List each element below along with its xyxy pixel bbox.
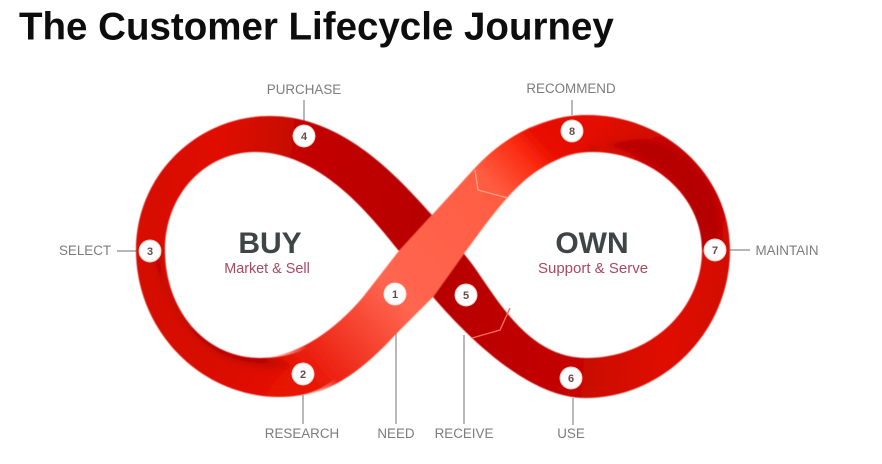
step 5 marker [455, 284, 477, 306]
OWN center label: OWN [555, 227, 629, 260]
ribbon: left loop upper arc [136, 116, 432, 262]
chevron: upper [475, 170, 508, 198]
stage labels: RECOMMEND [526, 81, 616, 96]
step 6 marker [560, 367, 582, 389]
shading: right upper crescent [578, 140, 722, 250]
step 2 marker: 2 [300, 369, 306, 381]
OWN center label: Support & Serve [538, 260, 648, 277]
shading: left lower crescent [155, 250, 296, 368]
step 7 marker [704, 239, 726, 261]
step 4 marker [293, 125, 315, 147]
step 3 marker: 3 [147, 246, 153, 258]
title: The Customer Lifecycle Journey [19, 6, 614, 48]
stage labels: RESEARCH [265, 426, 339, 441]
ribbon: light crossing band [262, 115, 593, 397]
BUY center label: Market & Sell [224, 261, 310, 277]
step 4 marker: 4 [301, 131, 308, 143]
infinity loop ribbon [136, 115, 730, 398]
ribbon: right loop upper arc [528, 115, 730, 250]
ribbon: right loop lower band [400, 215, 730, 398]
step 2 marker [292, 363, 314, 385]
OWN center label [538, 227, 648, 277]
step 1 marker: 1 [392, 289, 398, 301]
step 5 marker: 5 [463, 290, 469, 302]
step markers [139, 120, 726, 389]
stage labels: PURCHASE [267, 82, 341, 97]
BUY center label: BUY [238, 227, 302, 260]
step 1 marker [384, 283, 406, 305]
stage labels [59, 81, 818, 441]
step 6 marker: 6 [568, 373, 574, 385]
stage labels: RECEIVE [435, 426, 493, 441]
step 8 marker: 8 [569, 126, 575, 138]
stage labels: USE [557, 426, 585, 441]
step 3 marker [139, 240, 161, 262]
step 8 marker [561, 120, 583, 142]
step 7 marker: 7 [712, 245, 718, 257]
chevron marks [472, 170, 510, 338]
stage labels: MAINTAIN [756, 243, 818, 258]
chevron: lower [472, 308, 510, 338]
BUY center label [224, 227, 310, 277]
ribbon: left loop lower arc [136, 250, 340, 397]
connector lines [117, 100, 750, 425]
stage labels: NEED [377, 426, 415, 441]
stage labels: SELECT [59, 243, 111, 258]
